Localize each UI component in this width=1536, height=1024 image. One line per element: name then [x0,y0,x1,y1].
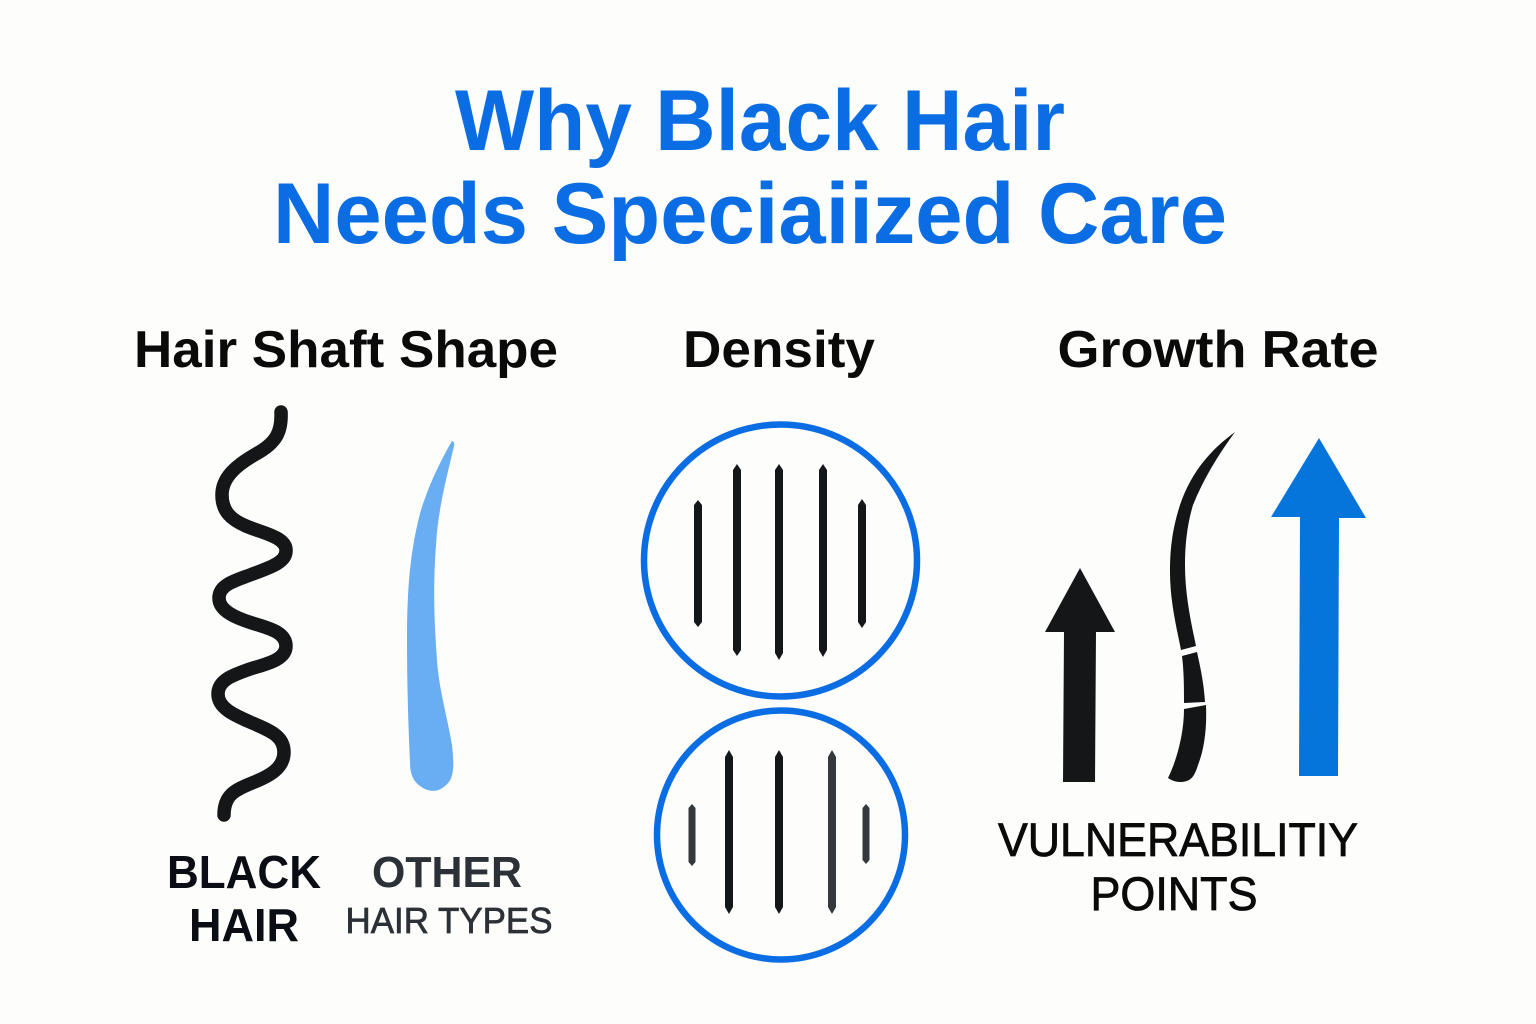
label: other hair types: HAIR TYPES [346,900,552,941]
label: other hair types: OTHER [372,848,522,897]
icon: hair strand with vulnerability points [1168,432,1235,782]
label: vulnerability points: POINTS [1090,867,1258,920]
label: black hair: BLACK [167,846,321,898]
heading: hair shaft shape: Hair Shaft Shape [134,321,558,379]
label: other hair types [346,848,552,941]
heading: growth rate: Growth Rate [1058,321,1378,379]
icon: black hair wavy strand [218,412,286,815]
label: black hair: HAIR [189,899,299,951]
label: black hair [167,846,321,951]
title: Needs Speciaiized Care [273,166,1227,262]
label: vulnerability points: VULNERABILITIY [998,813,1358,866]
title: Why Black Hair [455,73,1065,169]
icon: sparse follicle circle [657,710,905,960]
label: vulnerability points [998,813,1358,920]
heading: density: Density [683,321,875,379]
title [273,73,1227,262]
icon: blue up arrow [1271,438,1366,776]
icon: black up arrow [1045,568,1115,782]
icon: dense follicle circle [644,424,917,696]
icon: other hair strand [407,441,454,791]
